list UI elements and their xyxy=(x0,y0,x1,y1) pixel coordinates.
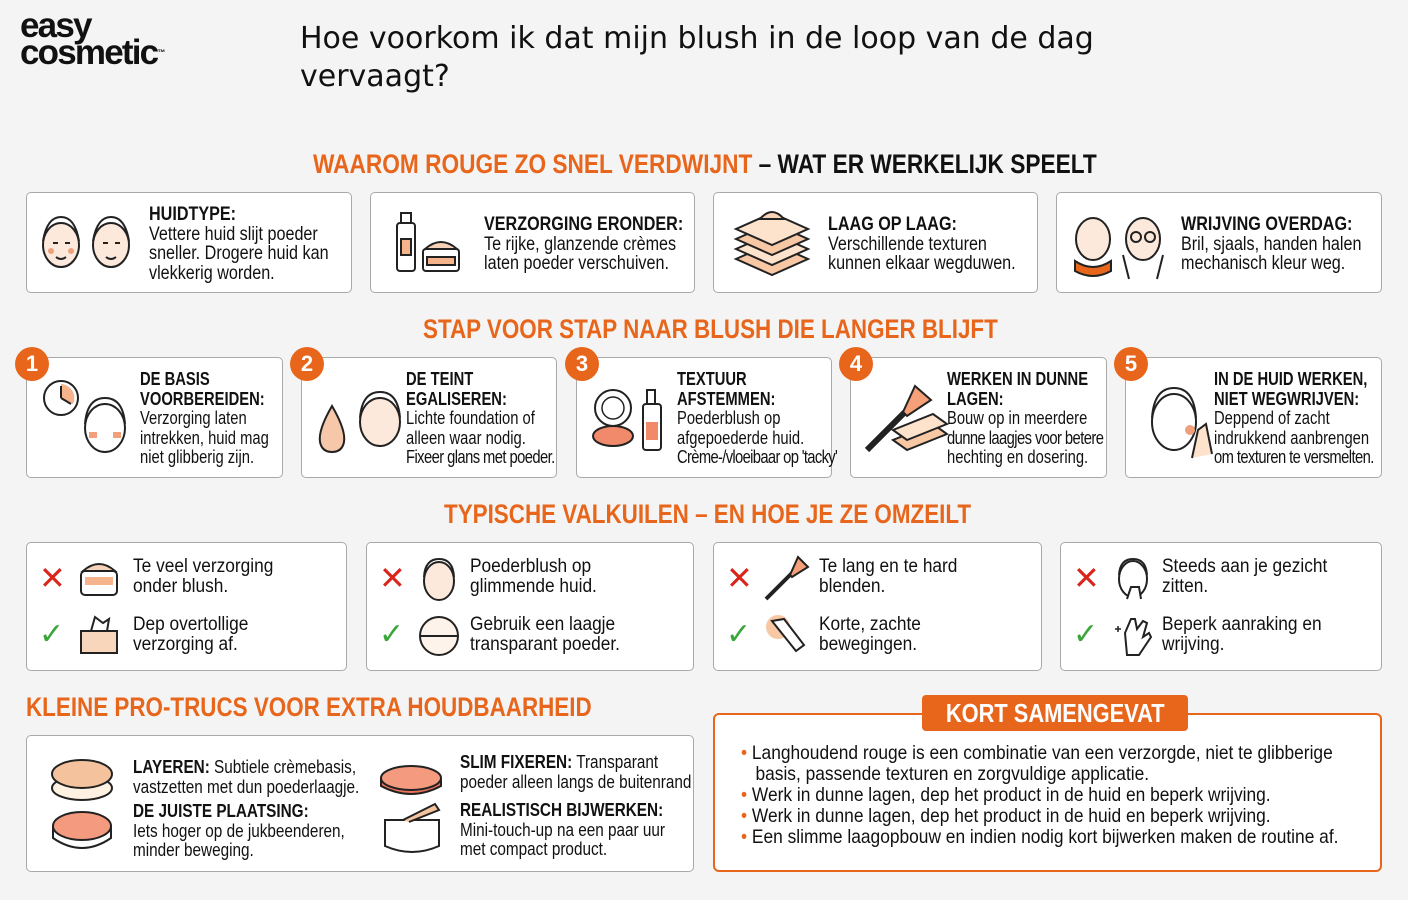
text: DE BASIS xyxy=(140,369,210,389)
text: afgepoederde huid. xyxy=(677,428,804,448)
text xyxy=(140,369,269,467)
icon: tissue box xyxy=(80,615,118,654)
icon: creams xyxy=(396,212,460,272)
text: Crème-/vloeibaar op 'tacky' xyxy=(677,447,837,467)
title: Hoe voorkom ik dat mijn blush in de loop van de dag xyxy=(300,21,1094,56)
icon: compact and serum xyxy=(592,389,662,451)
text: plaatsing xyxy=(133,801,345,860)
text: AFSTEMMEN: xyxy=(677,388,775,408)
text: mechanisch kleur weg. xyxy=(1181,253,1345,274)
icon: check: ✓ xyxy=(726,617,751,652)
icon: hand xyxy=(766,615,806,652)
summary list: basis, passende texturen en zorgvuldige applicatie. xyxy=(755,763,1149,785)
text: IN DE HUID WERKEN, xyxy=(1214,369,1367,389)
text: Deppend of zacht xyxy=(1214,408,1330,428)
step 1 xyxy=(26,357,283,478)
badge: kort samengevat xyxy=(922,695,1188,731)
text: VOORBEREIDEN: xyxy=(140,388,265,408)
icon: brush xyxy=(764,555,810,600)
text: EGALISEREN: xyxy=(406,388,507,408)
text: VERZORGING ERONDER: xyxy=(484,214,683,235)
text: zitten. xyxy=(1162,576,1208,597)
logo xyxy=(20,6,165,72)
text: plaatsing: minder beweging. xyxy=(133,840,254,860)
text xyxy=(406,369,555,467)
text: indrukkend aanbrengen xyxy=(1214,428,1369,448)
text: layeren: LAYEREN: Subtiele crèmebasis, xyxy=(133,757,356,777)
text: sneller. Drogere huid kan xyxy=(149,243,329,264)
icon: powder puff xyxy=(419,616,459,656)
icon: blush compact and pouch xyxy=(377,754,447,858)
text: WERKEN IN DUNNE xyxy=(947,369,1088,389)
text: bijwerken xyxy=(460,801,665,860)
text: TEXTUUR xyxy=(677,369,747,389)
text: bijwerken: Mini-touch-up na een paar uur xyxy=(460,820,665,840)
heading: valkuilen: TYPISCHE VALKUILEN – EN HOE JE ZE OMZEILT xyxy=(444,499,971,529)
summary list: • Langhoudend rouge is een combinatie van een verzorgde, niet te glibberige xyxy=(741,742,1333,764)
text: Bril, sjaals, handen halen xyxy=(1181,234,1361,254)
badge 4: 4 xyxy=(850,351,862,376)
icon: check: ✓ xyxy=(39,617,64,652)
text: Korte, zachte xyxy=(819,614,921,635)
icon: layered powder xyxy=(51,759,113,849)
icon: faces with scarf and glasses xyxy=(1074,217,1164,280)
icon: shiny face xyxy=(423,558,455,601)
text: Dep overtollige xyxy=(133,614,248,635)
text: NIET WEGWRIJVEN: xyxy=(1214,388,1359,408)
text: plaatsing: Iets hoger op de jukbeenderen, xyxy=(133,820,345,840)
heading: pro-trucs: KLEINE PRO-TRUCS VOOR EXTRA HOUDBAARHEID xyxy=(26,692,592,722)
text: Fixeer glans met poeder. xyxy=(406,447,555,467)
icon: brush and layers xyxy=(864,384,949,452)
badge 2 xyxy=(290,347,324,381)
panel: wrijving xyxy=(1056,192,1382,293)
text: Poederblush op xyxy=(470,556,591,577)
icon: cross: ✕ xyxy=(1073,559,1100,597)
panel: huidtype xyxy=(26,192,352,293)
text: alleen waar nodig. xyxy=(406,428,526,448)
step 5 xyxy=(1125,357,1382,478)
text: vlekkerig worden. xyxy=(149,262,275,284)
text: verzorging af. xyxy=(133,634,238,655)
text xyxy=(1181,214,1361,274)
badge 5 xyxy=(1114,347,1148,381)
text: Beperk aanraking en xyxy=(1162,614,1322,635)
text: niet glibberig zijn. xyxy=(140,447,254,467)
icon: clock and face xyxy=(43,380,126,453)
heading: stap voor stap: STAP VOOR STAP NAAR BLUSH DIE LANGER BLIJFT xyxy=(423,314,998,344)
text xyxy=(819,556,957,597)
text xyxy=(1162,614,1322,655)
icon: sponge and face xyxy=(318,391,401,453)
text: intrekken, huid mag xyxy=(140,428,269,448)
badge: kort samengevat: KORT SAMENGEVAT xyxy=(946,698,1164,728)
text: Te veel verzorging xyxy=(133,556,273,577)
text xyxy=(484,214,683,274)
text xyxy=(133,556,273,597)
step 4 xyxy=(850,357,1107,478)
panel: pro tips xyxy=(26,735,694,872)
text: Steeds aan je gezicht xyxy=(1162,556,1327,577)
panel: verzorging xyxy=(370,192,695,293)
text: bewegingen. xyxy=(819,634,917,655)
text: Lichte foundation of xyxy=(406,408,535,428)
step 3 xyxy=(576,357,832,478)
icon: layers xyxy=(734,211,810,276)
pitfall 2 xyxy=(366,542,694,671)
text: fixeren: SLIM FIXEREN: Transparant xyxy=(460,752,658,772)
pitfall 3 xyxy=(713,542,1042,671)
pitfall 1 xyxy=(26,542,347,671)
text xyxy=(1214,369,1374,467)
text: layeren xyxy=(133,757,359,797)
badge 1 xyxy=(15,347,49,381)
icon: cross: ✕ xyxy=(726,559,753,597)
text: Verzorging laten xyxy=(140,408,247,428)
text: blenden. xyxy=(819,576,885,597)
text xyxy=(677,369,838,467)
text: hechting en dosering. xyxy=(947,447,1088,467)
text: DE TEINT xyxy=(406,369,473,389)
text: dunne laagjes voor betere xyxy=(947,428,1103,448)
text: LAAG OP LAAG: xyxy=(828,214,957,235)
text xyxy=(149,204,329,284)
badge 4 xyxy=(839,347,873,381)
icon: face touching xyxy=(1118,558,1148,600)
badge 3 xyxy=(565,347,599,381)
text: fixeren: poeder alleen langs de buitenrand xyxy=(460,772,691,792)
icon: jar xyxy=(80,563,118,596)
text xyxy=(828,214,1016,274)
text xyxy=(133,614,248,655)
icon: check: ✓ xyxy=(379,617,404,652)
icon: cross: ✕ xyxy=(39,559,66,597)
icon: cross: ✕ xyxy=(379,559,406,597)
summary list: • Werk in dunne lagen, dep het product in de huid en beperk wrijving. xyxy=(741,805,1271,827)
badge 5: 5 xyxy=(1125,351,1137,376)
text: fixeren xyxy=(460,753,691,792)
text: kunnen elkaar wegduwen. xyxy=(828,253,1016,274)
text: bijwerken: REALISTISCH BIJWERKEN: xyxy=(460,800,663,820)
summary list: • Een slimme laagopbouw en indien nodig kort bijwerken maken de routine af. xyxy=(741,826,1338,848)
summary list: • Werk in dunne lagen, dep het product in de huid en beperk wrijving. xyxy=(741,784,1271,806)
text: WRIJVING OVERDAG: xyxy=(1181,214,1352,235)
text: Bouw op in meerdere xyxy=(947,408,1087,428)
text: om texturen te versmelten. xyxy=(1214,447,1374,467)
text: Te lang en te hard xyxy=(819,556,957,577)
text xyxy=(819,614,921,655)
badge 2: 2 xyxy=(301,351,313,376)
text xyxy=(1162,556,1328,597)
text: layeren: vastzetten met dun poederlaagje. xyxy=(133,776,359,796)
title xyxy=(300,21,1094,94)
icon: sparkle hand xyxy=(1115,618,1152,656)
pitfall 4 xyxy=(1060,542,1382,671)
text: transparant poeder. xyxy=(470,634,620,655)
title: vervaagt? xyxy=(300,59,450,94)
text xyxy=(947,369,1104,467)
text: bijwerken: met compact product. xyxy=(460,839,607,859)
text: glimmende huid. xyxy=(470,576,597,597)
text: Vettere huid slijt poeder xyxy=(149,224,318,244)
logo: cosmetic™ xyxy=(20,33,165,72)
text: Gebruik een laagje xyxy=(470,614,615,635)
text: Poederblush op xyxy=(677,408,780,428)
panel: laag op laag xyxy=(713,192,1038,293)
icon: faces xyxy=(42,216,130,268)
text xyxy=(470,556,597,597)
text: onder blush. xyxy=(133,576,228,597)
text: Verschillende texturen xyxy=(828,234,987,254)
heading: waarom: WAAROM ROUGE ZO SNEL VERDWIJNT – WAT ER WERKELIJK SPEELT xyxy=(313,149,1097,179)
text xyxy=(470,614,620,655)
text: wrijving. xyxy=(1162,634,1224,655)
text: HUIDTYPE: xyxy=(149,204,236,225)
logo: easy xyxy=(20,6,91,45)
icon: check: ✓ xyxy=(1073,617,1098,652)
badge 1: 1 xyxy=(26,351,38,376)
text: plaatsing: DE JUISTE PLAATSING: xyxy=(133,801,309,821)
step 2 xyxy=(301,357,557,478)
summary list xyxy=(741,743,1338,848)
text: LAGEN: xyxy=(947,388,1004,408)
text: Te rijke, glanzende crèmes xyxy=(484,234,676,254)
panel: kort samengevat xyxy=(713,713,1382,872)
badge 3: 3 xyxy=(576,351,588,376)
icon: face with hand xyxy=(1151,387,1213,458)
text: laten poeder verschuiven. xyxy=(484,253,669,274)
